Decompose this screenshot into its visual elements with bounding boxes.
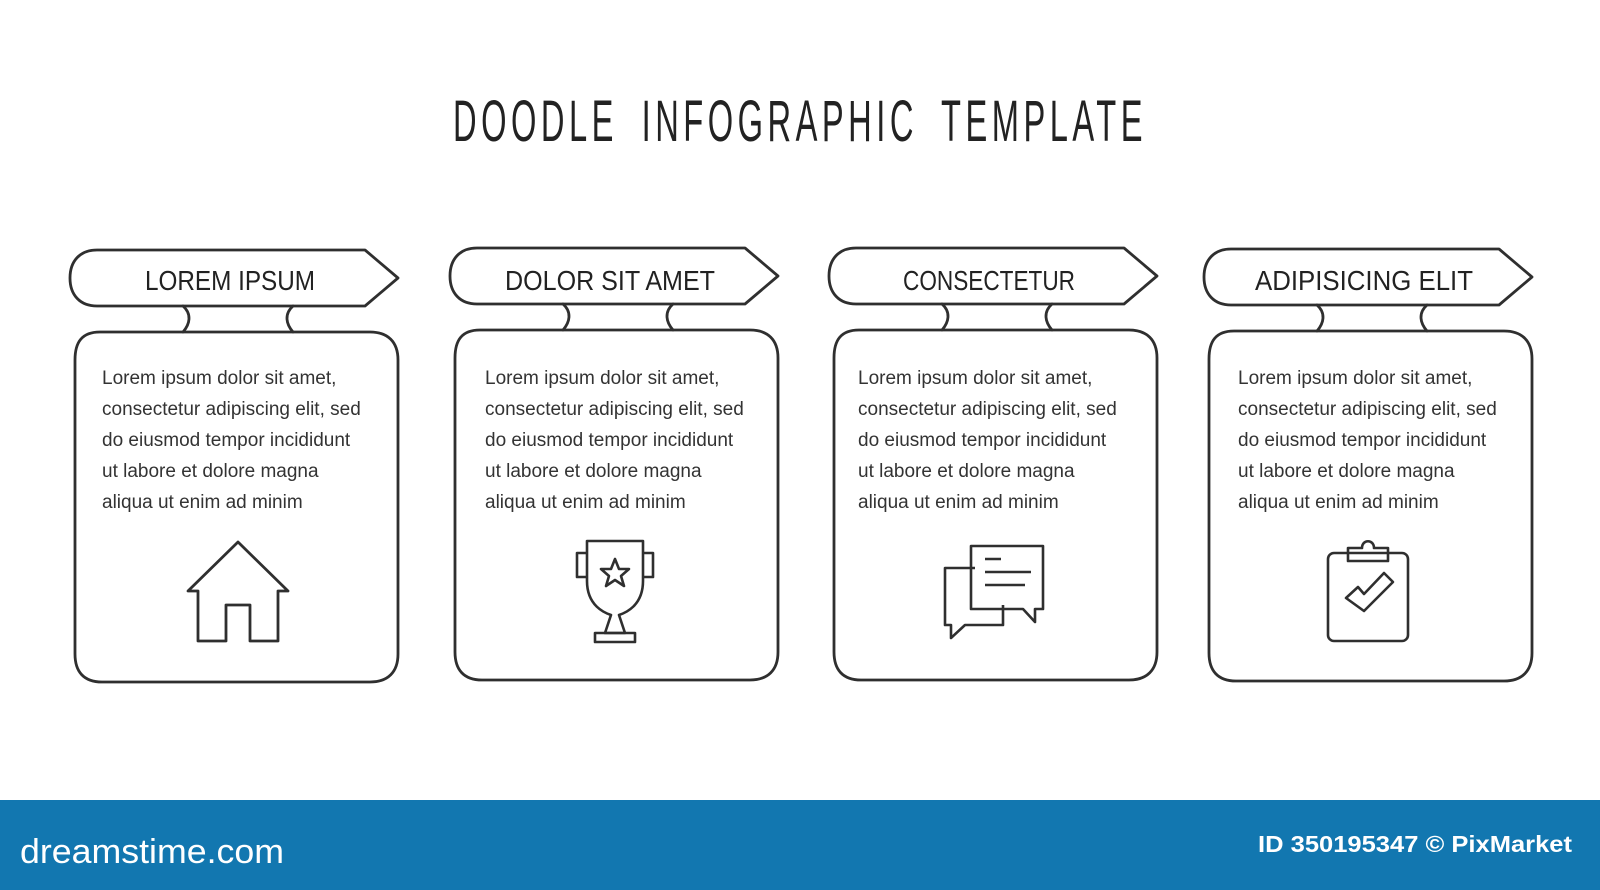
text block: aliqua ut enim ad minim: [102, 492, 303, 513]
panel: dolor sit amet: [450, 248, 778, 680]
heading: consectetur: CONSECTETUR: [903, 265, 1075, 296]
text block: [485, 368, 744, 513]
panel: lorem ipsum: [70, 250, 398, 682]
text block: consectetur adipiscing elit, sed: [485, 399, 744, 420]
text block: do eiusmod tempor incididunt: [1238, 430, 1487, 451]
heading: dolor sit amet: DOLOR SIT AMET: [505, 265, 715, 296]
footer bar: [0, 800, 1600, 890]
icon: trophy: [577, 541, 653, 642]
text block: ut labore et dolore magna: [102, 461, 319, 482]
text block: Lorem ipsum dolor sit amet,: [858, 368, 1092, 389]
text block: aliqua ut enim ad minim: [1238, 492, 1439, 513]
text block: [858, 368, 1117, 513]
text block: aliqua ut enim ad minim: [485, 492, 686, 513]
text block: consectetur adipiscing elit, sed: [1238, 399, 1497, 420]
text block: do eiusmod tempor incididunt: [858, 430, 1107, 451]
heading: adipisicing elit: ADIPISICING ELIT: [1255, 265, 1473, 296]
text block: ut labore et dolore magna: [1238, 461, 1455, 482]
text block: ut labore et dolore magna: [858, 461, 1075, 482]
icon: chat bubbles: [945, 546, 1043, 638]
text block: do eiusmod tempor incididunt: [102, 430, 351, 451]
heading: lorem ipsum: LOREM IPSUM: [145, 265, 315, 296]
panel: consectetur: [829, 248, 1157, 680]
footer logo: dreamstime.com: [20, 833, 284, 871]
panel: adipisicing elit: [1204, 249, 1532, 681]
text block: Lorem ipsum dolor sit amet,: [102, 368, 336, 389]
text block: Lorem ipsum dolor sit amet,: [1238, 368, 1472, 389]
text block: do eiusmod tempor incididunt: [485, 430, 734, 451]
text block: [102, 368, 361, 513]
text block: consectetur adipiscing elit, sed: [102, 399, 361, 420]
icon: clipboard: [1328, 541, 1408, 641]
text block: [1238, 368, 1497, 513]
text block: consectetur adipiscing elit, sed: [858, 399, 1117, 420]
text block: ut labore et dolore magna: [485, 461, 702, 482]
text block: Lorem ipsum dolor sit amet,: [485, 368, 719, 389]
footer credit: ID 350195347 © PixMarket: [1258, 831, 1572, 857]
icon: house: [188, 542, 288, 641]
text block: aliqua ut enim ad minim: [858, 492, 1059, 513]
